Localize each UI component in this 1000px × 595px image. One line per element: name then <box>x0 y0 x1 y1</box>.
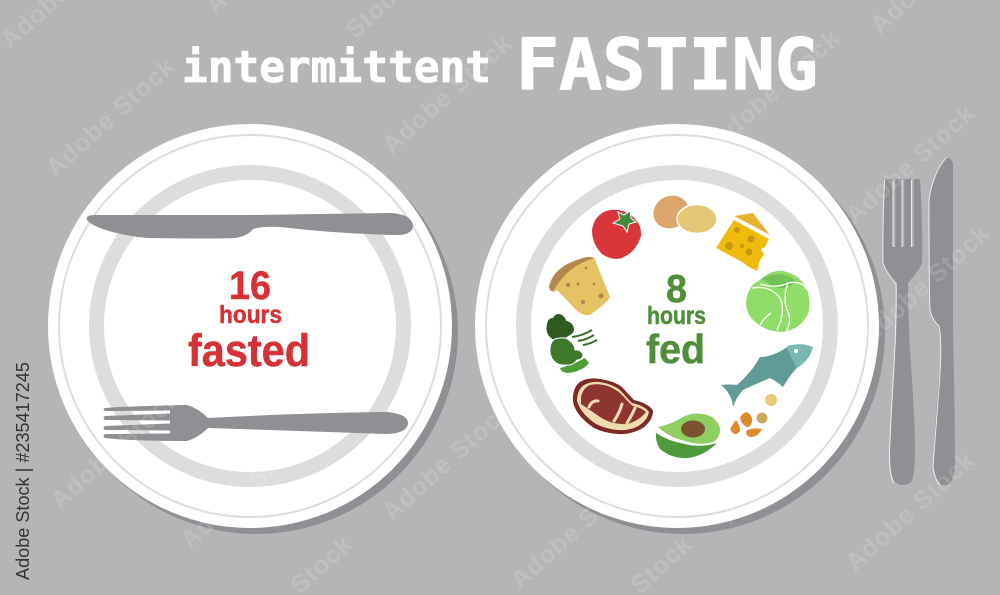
watermark: Adobe Stock <box>40 52 181 182</box>
icon: fork horizontal <box>104 405 408 441</box>
icon: tomato <box>592 210 641 259</box>
watermark: Adobe Stock <box>45 384 186 514</box>
text: 16 hours fasted: hours <box>219 301 282 329</box>
watermark: Adobe Stock <box>175 424 316 554</box>
icon: avocado <box>656 414 720 458</box>
icon: nuts <box>730 394 777 437</box>
icon: fork vertical <box>883 178 922 485</box>
watermark: Adobe Stock <box>377 396 518 526</box>
text: 8 hours fed <box>646 268 706 372</box>
icon: toast bread <box>549 257 610 315</box>
title: intermittent <box>182 42 491 93</box>
icon: knife horizontal <box>87 213 413 238</box>
text: 16 hours fasted <box>188 264 310 376</box>
icon: cabbage <box>746 271 810 332</box>
icon: broccoli <box>546 314 597 373</box>
icon: cheese <box>716 213 770 271</box>
icon: knife vertical <box>929 157 955 485</box>
text: 8 hours fed: 8 <box>666 268 687 311</box>
title <box>182 24 818 106</box>
text: 8 hours fed: fed <box>646 326 705 372</box>
watermark: Adobe Stock <box>715 399 856 529</box>
text: 16 hours fasted: fasted <box>188 325 310 376</box>
side credit text: Adobe Stock | #235417245 <box>13 362 33 580</box>
panel: fed plate <box>475 124 885 534</box>
text: 8 hours fed: hours <box>647 302 706 330</box>
icon: steak <box>573 378 653 434</box>
panel: fasted plate <box>48 124 458 534</box>
watermark: Adobe Stock <box>705 24 846 154</box>
icon: fish <box>721 344 813 407</box>
watermark: Adobe Stock <box>855 219 996 349</box>
watermark: Adobe Stock <box>840 99 981 229</box>
watermark: Adobe Stock <box>505 464 646 594</box>
title: FASTING <box>516 24 818 106</box>
watermark: Adobe Stock <box>377 29 518 159</box>
watermark: Adobe Stock <box>840 446 981 576</box>
icon: potatoes <box>648 190 717 234</box>
text: 16 hours fasted: 16 <box>229 264 271 308</box>
